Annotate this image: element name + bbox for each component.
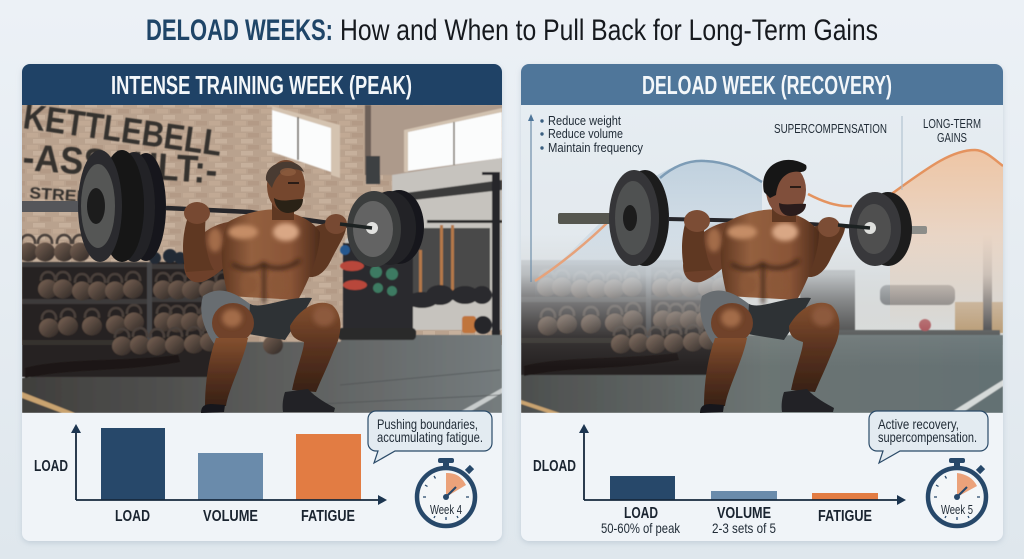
panel card [22,64,502,541]
panel: deload week [521,64,1003,541]
bar chart: peak week [34,424,387,525]
title [146,14,878,47]
bar: volume [711,491,777,500]
title: How and When to Pull Back for Long-Term Gains [340,14,878,47]
barbell right plates [340,190,424,267]
barbell left plates [558,170,669,266]
bar: load [610,476,675,500]
barbell left plates [22,150,166,262]
bar labels: VOLUME [717,505,771,522]
kettlebell shelves [521,260,739,376]
bar labels: LOAD [624,505,658,522]
gym windows [268,105,502,178]
athlete [558,160,927,413]
panel: intense training week [18,64,502,541]
bar sublabels: 50-60% of peak [601,520,681,536]
bar labels [115,508,355,525]
gym wall lettering: STREN [29,185,90,206]
wall equipment [340,225,492,335]
hands [684,210,840,237]
bar labels: LOAD [115,508,150,525]
bar labels: VOLUME [203,508,258,525]
kettlebell shelves [22,262,240,378]
icon: stopwatch week 4: Week 4 [430,503,462,517]
gym wall lettering: KETTLEBELL [21,95,225,164]
athlete body [682,210,845,413]
bar labels [624,505,872,525]
panel header: DELOAD WEEK (RECOVERY) [642,70,892,100]
callout [368,411,492,463]
chart axes [584,430,900,500]
curve label: long-term gains [924,119,980,142]
grey wall and rack [345,158,502,330]
callout: Pushing boundaries, [377,416,478,432]
bar labels: FATIGUE [818,508,872,525]
photo: athlete squatting with lighter barbell in faded gym [521,105,1003,413]
photo: athlete squatting with heavy barbell in gym [18,95,502,413]
curve label: long-term gains: LONG-TERM [923,116,981,131]
floor [22,335,502,413]
bullet list: Reduce weight [548,113,621,128]
barbell bar [166,208,372,229]
bullet list: Maintain frequency [548,140,643,155]
callout [869,411,988,463]
bar: fatigue [812,493,878,500]
bullet list: Reduce volume [548,126,623,141]
callout: accumulating fatigue. [377,429,483,445]
panel card [521,64,1003,541]
athlete body [183,210,346,413]
athlete head [763,160,807,222]
chart axes [76,430,380,500]
barbell bar [668,219,875,228]
curve y axis arrow [528,114,534,282]
bar sublabels: 2-3 sets of 5 [712,520,776,536]
panel header: INTENSE TRAINING WEEK (PEAK) [111,70,412,100]
fog overlay [521,105,1003,354]
athlete head [266,160,305,220]
callout: Active recovery, [878,416,959,432]
title: DELOAD WEEKS: [146,14,333,47]
bar: load [101,428,165,500]
bar: fatigue [296,434,361,500]
barbell right plates [838,192,927,266]
bar: volume [198,453,263,500]
icon: stopwatch week 5 [928,458,986,526]
gym wall lettering: -ASSAULT:- [21,137,219,193]
curve label: long-term gains: GAINS [937,130,967,145]
bullet list [540,113,643,155]
bar chart: deload week [533,424,906,536]
bar labels: FATIGUE [301,508,355,525]
athlete [22,150,424,413]
callout: supercompensation. [878,429,977,445]
icon: stopwatch week 5: Week 5 [941,503,973,517]
panel header [521,64,1003,105]
floor [521,335,1003,413]
hands [184,202,347,234]
curve label: supercompensation: SUPERCOMPENSATION [774,121,887,136]
chart: supercompensation curve [535,150,1003,330]
axis label: DLOAD [533,458,576,475]
gym wall lettering [23,105,220,201]
icon: stopwatch week 4 [417,458,475,526]
panel header [22,64,502,105]
faded wall equipment [800,160,1003,345]
bar sublabels [601,520,776,536]
axis label: LOAD [34,458,68,475]
